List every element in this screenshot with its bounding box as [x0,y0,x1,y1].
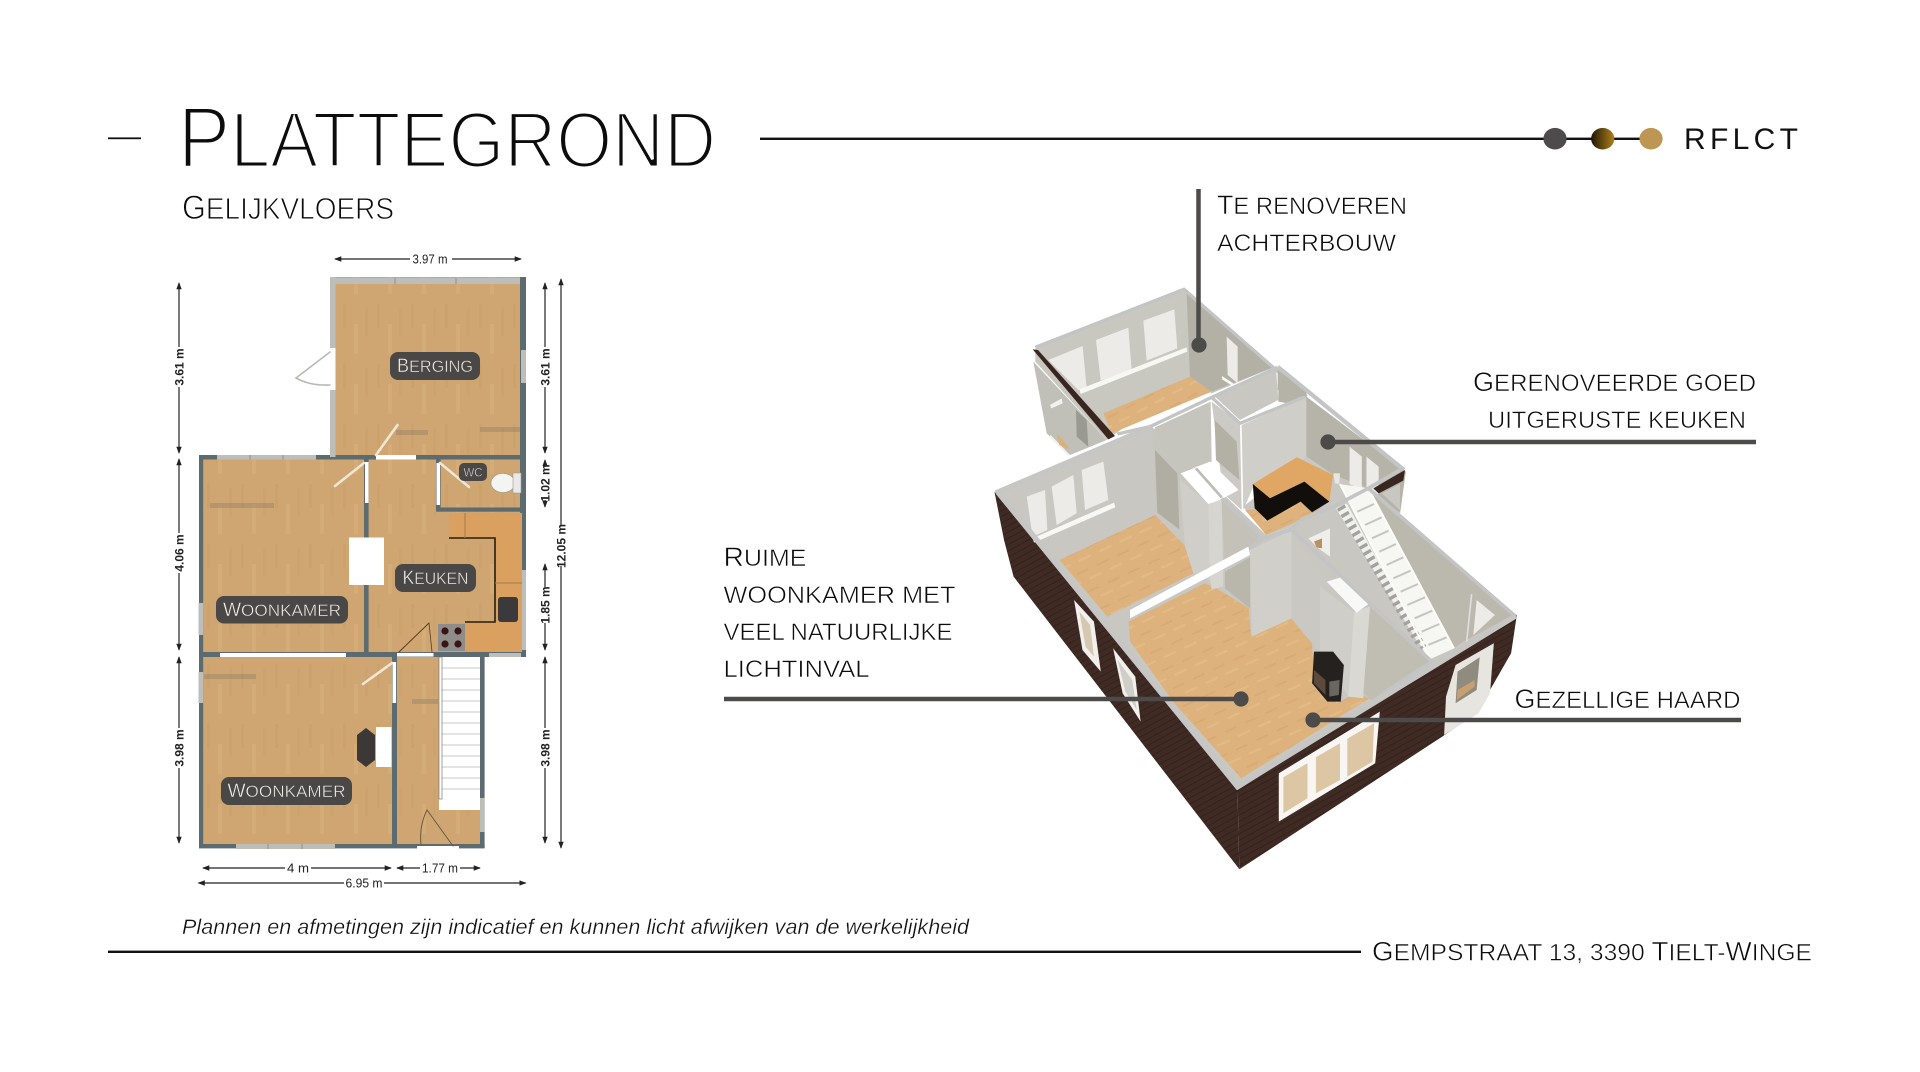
room label: WC [459,463,487,481]
title dash [108,137,141,139]
dimension lines: 12.05 m [554,524,568,568]
header rule and logo [760,123,1798,156]
walls [199,277,526,848]
left room walls [1027,428,1180,543]
staircase [1333,473,1454,660]
room label: Woonkamer lower [221,777,352,805]
callout: Te renoveren achterbouw: TE RENOVEREN [1217,190,1407,220]
room label: Keuken: KEUKEN [402,568,468,589]
stairs [439,657,480,810]
kitchen floor and counter [1245,457,1333,535]
wood stove [1312,652,1344,702]
main building rims [996,427,1516,822]
dimension lines: 1.85 m [538,586,552,624]
kitchen counters [438,513,522,652]
stove [438,624,465,651]
room label: Woonkamer lower: WOONKAMER [228,781,346,802]
fireplace [357,728,375,767]
central walls [1130,462,1390,698]
room label: Woonkamer upper: WOONKAMER [223,600,341,621]
room label: Woonkamer upper [216,596,348,624]
dimension lines: 1.02 m [538,464,552,502]
address: GEMPSTRAAT 13, 3390 TIELT-WINGE [1372,936,1812,966]
logo dot: dark grey [1543,128,1567,150]
callout: woonkamer: WOONKAMER MET [724,582,956,609]
windows [198,277,526,849]
callout: Te renoveren achterbouw: ACHTERBOUW [1217,230,1396,257]
back building right wing [1243,367,1406,535]
exterior walls and base [994,425,1517,869]
room label: Berging [390,352,480,380]
3D house view [994,289,1517,869]
dimension lines: 6.95 m [346,876,382,890]
dimension lines: 3.97 m [412,252,448,266]
sink [498,597,518,622]
dimension lines: 3.98 m [172,729,186,767]
room label: WC: WC [464,466,483,480]
callout: keuken: UITGERUSTE KEUKEN [1488,407,1746,434]
exterior windows left [1074,600,1141,722]
exterior window front [1279,712,1380,822]
floor plan [172,251,568,890]
openings and doors [220,348,459,851]
callout: haard: GEZELLIGE HAARD [1514,684,1740,714]
callout: keuken [1320,367,1756,450]
callout: woonkamer: RUIME [724,542,806,572]
faint area labels [204,427,520,704]
back building [1033,289,1307,510]
room label: Berging: BERGING [397,356,473,377]
door swings [296,352,469,846]
floor surfaces [199,277,526,848]
callout: haard [1305,684,1741,728]
callout: woonkamer: LICHTINVAL [724,656,870,683]
dimension lines [172,251,568,890]
callout: woonkamer [724,542,1249,707]
dimension lines: 3.61 m [172,348,186,386]
subtitle: GELIJKVLOERS [182,189,394,227]
room label: Keuken [395,564,476,592]
callout: keuken: GERENOVEERDE GOED [1473,367,1756,397]
dimension lines: 4 m [287,860,309,876]
callout: woonkamer: VEEL NATUURLIJKE [724,619,952,646]
dimension lines: 3.98 m [538,729,552,767]
dimension lines: 4.06 m [172,534,186,572]
disclaimer note: Plannen en afmetingen zijn indicatief en kunnen licht afwijken van de werkelijkheid [182,916,970,939]
title: PLATTEGROND [178,90,716,186]
exterior door right [1444,643,1494,735]
dimension lines: 3.61 m [538,348,552,386]
footer rule [108,951,1361,953]
stairs room and right-back wall [1300,470,1515,700]
dimension lines: 1.77 m [422,860,458,876]
callout: Te renoveren achterbouw [1191,189,1407,353]
toilet [491,473,521,493]
header rule and logo: RFLCT [1684,123,1798,156]
